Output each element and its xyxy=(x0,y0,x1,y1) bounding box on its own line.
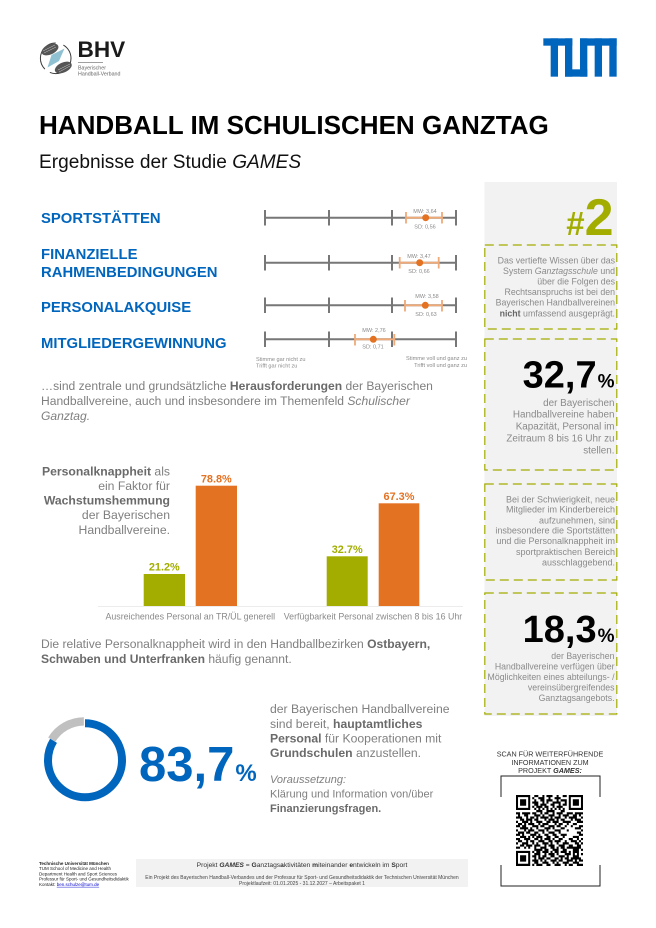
callout: difficulty: ausschlaggebend. xyxy=(542,558,615,568)
scale: Personalakquise: SD: 0,63 xyxy=(415,312,437,318)
bar: 32.7% xyxy=(327,544,368,606)
text block: staff shortage: ein Faktor für xyxy=(98,479,170,493)
logo wordmark: BHV xyxy=(78,37,125,62)
panel: project footer xyxy=(136,859,468,887)
callout: knowledge: über die Folgen des xyxy=(537,276,616,286)
big rank: #2: #2 xyxy=(566,189,614,247)
logo: BHV: Handball-Verband xyxy=(78,72,120,78)
callout: knowledge: Das vertiefte Wissen über das xyxy=(498,255,615,265)
callout: 18,3%: Möglichkeiten eines abteilungs- / xyxy=(488,672,615,682)
callout: knowledge: System Ganztagsschule und xyxy=(503,266,615,276)
title: HANDBALL IM SCHULISCHEN GANZTAG xyxy=(39,110,549,140)
text block: staff shortage: Handballvereine. xyxy=(79,523,170,537)
callout: knowledge: nicht umfassend ausgeprägt. xyxy=(500,309,615,319)
subtitle: Ergebnisse der Studie GAMES xyxy=(39,152,301,173)
text block: staff shortage: Personalknappheit als xyxy=(42,465,170,479)
text block: challenges summary: Schulischer xyxy=(347,394,411,408)
bar chart xyxy=(98,473,463,621)
callout: difficulty: sportpraktischen Bereich xyxy=(516,547,615,557)
text block: scan prompt: SCAN FÜR WEITERFÜHRENDE xyxy=(497,750,603,759)
text block: willingness: Finanzierungsfragen. xyxy=(270,803,381,815)
scale: Mitgliedergewinnung: MW: 2,76 xyxy=(362,328,386,334)
callout: 18,3%: 18,3% xyxy=(523,609,615,651)
text block: scan prompt: PROJEKT GAMES: xyxy=(518,766,582,775)
axis label: group 2: Verfügbarkeit Personal zwischen 8 bis 16 Uhr xyxy=(284,611,462,621)
bar: 67.3% xyxy=(379,491,419,606)
callout: 18,3%: vereinsübergreifendes xyxy=(528,683,615,693)
text block: regions: Die relative Personalknappheit wird in den Handballbezirken Ostbayern, xyxy=(41,637,430,651)
scale label: low end: Trifft gar nicht zu xyxy=(256,364,297,370)
logo: BHV xyxy=(40,37,125,78)
scale: Finanzielle Rahmenbedingungen: SD: 0,66 xyxy=(408,269,430,275)
text block: institution: Department Health and Sport Sciences xyxy=(39,871,118,876)
heading: Mitgliedergewinnung: MITGLIEDERGEWINNUNG xyxy=(41,336,227,352)
heading: Finanzielle Rahmenbedingungen: FINANZIELLE xyxy=(41,247,137,263)
icon: qr code xyxy=(516,795,583,866)
text block: staff shortage: Wachstumshemmung xyxy=(44,494,170,508)
scale: Personalakquise: MW: 3,58 xyxy=(415,294,439,300)
callout: difficulty: Bei der Schwierigkeit, neue xyxy=(506,495,615,505)
project description: Projektlaufzeit: 01.01.2025 - 31.12.2027 – Arbeitspaket 1 xyxy=(239,881,365,887)
scale label: high end: Trifft voll und ganz zu xyxy=(414,363,467,369)
scale: Finanzielle Rahmenbedingungen xyxy=(265,254,456,275)
callout: knowledge: Bayerischen Handballvereinen xyxy=(496,298,615,308)
qr code frame xyxy=(501,776,600,886)
heading: Sportstätten: SPORTSTÄTTEN xyxy=(41,210,161,227)
project description: Ein Projekt des Bayerischen Handball-Verbandes und der Professur für Sport- und Gesundheitsdidaktik der Technischen Universität München xyxy=(145,875,459,881)
scale label: high end: Stimme voll und ganz zu xyxy=(406,356,467,362)
icon: handball xyxy=(40,41,74,76)
scale: Sportstätten: MW: 3,64 xyxy=(413,209,437,215)
panel: sidebar xyxy=(484,182,617,716)
scale: Sportstätten xyxy=(265,209,456,231)
text block: willingness: Voraussetzung: xyxy=(270,774,346,786)
text block: willingness: Grundschulen xyxy=(270,746,353,760)
text block: regions: häufig genannt. xyxy=(208,652,292,666)
callout: 32,7%: Zeitraum 8 bis 16 Uhr zu xyxy=(506,434,614,445)
callout: 18,3% xyxy=(485,593,617,714)
bar: 67.3%: 67.3% xyxy=(384,491,415,503)
scale: Mitgliedergewinnung: SD: 0,71 xyxy=(362,345,384,351)
text block: willingness: Personal xyxy=(270,732,321,746)
text block: willingness: Klärung und Information von/über xyxy=(270,788,434,800)
text block: regions: Schwaben und Unterfranken xyxy=(41,652,205,666)
axis label: group 1: Ausreichendes Personal an TR/ÜL generell xyxy=(105,611,275,621)
donut chart: 83,7% xyxy=(32,707,136,811)
callout: difficulty: aufzunehmen, sind xyxy=(539,515,615,525)
heading: Personalakquise: PERSONALAKQUISE xyxy=(41,300,191,316)
callout: difficulty: Mitglieder im Kinderbereich xyxy=(506,505,615,515)
text block: institution: Professur für Sport- und Gesundheitsdidaktik xyxy=(39,877,130,882)
text block: willingness: für Kooperationen mit xyxy=(325,732,441,746)
scale: Personalakquise xyxy=(265,294,456,318)
callout: 18,3%: der Bayerischen xyxy=(551,651,614,661)
callout: knowledge: Rechtsanspruchs ist bei den xyxy=(504,287,615,297)
scale: Mitgliedergewinnung xyxy=(265,328,456,351)
heading: Finanzielle Rahmenbedingungen: RAHMENBEDINGUNGEN xyxy=(41,265,217,281)
callout: 32,7%: der Bayerischen xyxy=(543,398,614,409)
text block: challenges summary: Handballvereine, auch und insbesondere im Themenfeld xyxy=(41,394,347,408)
logo: TUM xyxy=(543,38,617,77)
text block: scan prompt: INFORMATIONEN ZUM xyxy=(511,758,589,767)
callout: difficulty xyxy=(485,484,617,580)
callout: 18,3%: Handballvereine verfügen über xyxy=(495,662,615,672)
text block: staff shortage: der Bayerischen xyxy=(82,508,170,522)
scale: Finanzielle Rahmenbedingungen: MW: 3,47 xyxy=(407,254,431,260)
callout: 32,7%: stellen. xyxy=(583,445,614,456)
logo: BHV: Bayerischer xyxy=(78,66,106,72)
text block: institution: TUM School of Medicine and Health xyxy=(39,866,112,871)
project name: Projekt GAMES = Ganztagsaktivitäten miteinander entwickeln im Sport xyxy=(197,862,407,869)
text block: willingness: sind bereit, xyxy=(270,717,333,731)
callout: 32,7% xyxy=(485,339,617,470)
bar: 21.2%: 21.2% xyxy=(149,562,180,574)
big number: 83,7%: 83,7% xyxy=(139,738,257,792)
callout: knowledge xyxy=(485,245,617,329)
callout: 18,3%: Ganztagsangebots. xyxy=(539,693,614,703)
scale label: low end: Stimme gar nicht zu xyxy=(256,357,305,363)
scale: Sportstätten: SD: 0,56 xyxy=(414,225,436,231)
text block: challenges summary: …sind zentrale und grundsätzliche Herausforderungen der Bayerischen xyxy=(41,379,433,393)
text block: willingness: anzustellen. xyxy=(356,746,421,760)
text block: willingness: hauptamtliches xyxy=(333,717,423,731)
callout: difficulty: und die Personalknappheit im xyxy=(496,536,615,546)
panel: challenges xyxy=(41,209,467,370)
bar: 21.2% xyxy=(144,562,185,606)
text block: willingness: der Bayerischen Handballvereine xyxy=(270,702,450,716)
callout: 32,7%: 32,7% xyxy=(523,355,615,397)
callout: 32,7%: Handballvereine haben xyxy=(513,410,614,421)
text block: institution: Technische Universität München xyxy=(39,861,109,866)
text block: institution: Kontakt: ben.schulze@tum.de xyxy=(39,882,99,887)
bar: 78.8% xyxy=(196,473,237,606)
callout: 32,7%: Kapazität, Personal im xyxy=(516,421,614,432)
bar: 78.8%: 78.8% xyxy=(201,473,232,485)
text block: challenges summary: Ganztag. xyxy=(41,409,90,423)
callout: difficulty: insbesondere die Sportstätten xyxy=(495,525,615,535)
bar: 32.7%: 32.7% xyxy=(332,544,363,556)
